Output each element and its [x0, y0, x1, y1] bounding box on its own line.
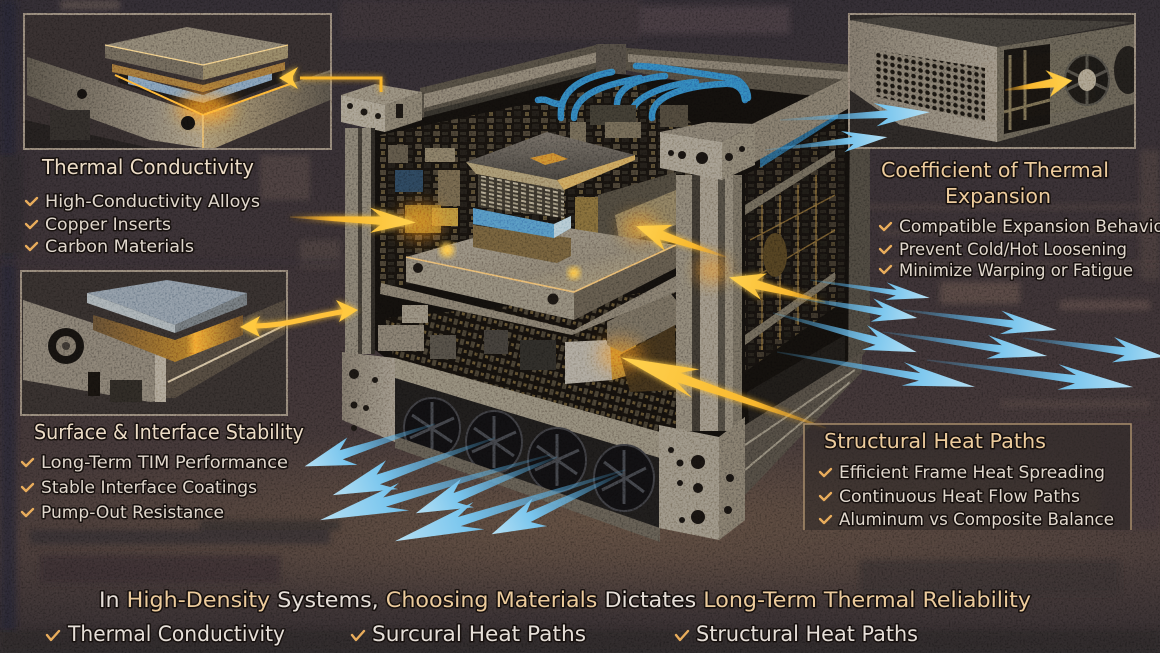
checklist — [820, 463, 1114, 530]
arrows: gold heat paths — [240, 67, 831, 442]
front right rail — [750, 68, 870, 165]
heat spreader plate — [406, 222, 676, 320]
checklist: Stable Interface Coatings — [41, 478, 257, 498]
panel: structural heat paths box — [804, 424, 1131, 530]
checklist: Minimize Warping or Fatigue — [899, 261, 1133, 281]
footer checklist: Thermal Conductivity — [67, 622, 285, 646]
arrows: blue airflow from fans — [300, 410, 630, 556]
panel: thermal conductivity image — [24, 14, 331, 149]
checklist: Continuous Heat Flow Paths — [839, 487, 1080, 507]
warm glow highlights — [398, 204, 728, 371]
fan bay — [395, 378, 660, 542]
shelf rail — [395, 358, 660, 460]
device: server frame — [341, 44, 870, 542]
footer checklist: Structural Heat Paths — [696, 622, 918, 646]
heading: Expansion — [945, 184, 1051, 208]
checklist — [880, 217, 1160, 281]
left pillar — [345, 128, 375, 354]
panel: coefficient of thermal expansion image — [849, 14, 1142, 148]
blue side window — [760, 92, 838, 168]
central processor stack — [440, 132, 635, 279]
right lower rails — [745, 352, 862, 495]
heading: Structural Heat Paths — [824, 429, 1046, 453]
block: coefficient of thermal expansion — [880, 158, 1160, 281]
lower shelf — [380, 276, 676, 335]
checklist: Copper Inserts — [45, 215, 171, 235]
checklist: Aluminum vs Composite Balance — [839, 510, 1114, 530]
checklist: High-Conductivity Alloys — [45, 192, 260, 212]
interior circuit boards — [375, 72, 850, 445]
heading: Coefficient of Thermal — [881, 158, 1109, 182]
checklist — [26, 192, 260, 257]
panel: surface and interface stability image — [21, 271, 287, 415]
front bottom corner block — [659, 417, 745, 540]
bottom left corner block — [342, 352, 395, 442]
checklist: Carbon Materials — [45, 237, 194, 257]
checklist: Pump-Out Resistance — [41, 503, 224, 523]
arrows: blue airflow from right side — [764, 100, 1160, 399]
arrow: panel fan gold arrow — [1003, 67, 1074, 103]
rear frame rails — [420, 44, 870, 380]
footer checklist — [47, 622, 918, 646]
circuit components — [378, 105, 688, 392]
heading: Surface & Interface Stability — [34, 420, 304, 444]
checklist: Long-Term TIM Performance — [41, 453, 288, 473]
top left corner block — [341, 84, 422, 132]
block: surface and interface stability — [22, 420, 304, 523]
checklist: Efficient Frame Heat Spreading — [839, 463, 1105, 483]
cooling tubes — [538, 66, 748, 118]
footer checklist: Surcural Heat Paths — [372, 622, 586, 646]
footer headline: In High-Density Systems, Choosing Materials Dictates Long-Term Thermal Reliability — [99, 588, 1031, 612]
front pillar — [676, 175, 742, 431]
front top corner block — [660, 122, 755, 180]
heading — [881, 158, 1109, 208]
block: structural heat paths — [820, 429, 1114, 530]
checklist: Prevent Cold/Hot Loosening — [899, 240, 1127, 260]
block: thermal conductivity — [26, 155, 260, 257]
checklist — [22, 453, 288, 523]
heading: Thermal Conductivity — [41, 155, 254, 179]
